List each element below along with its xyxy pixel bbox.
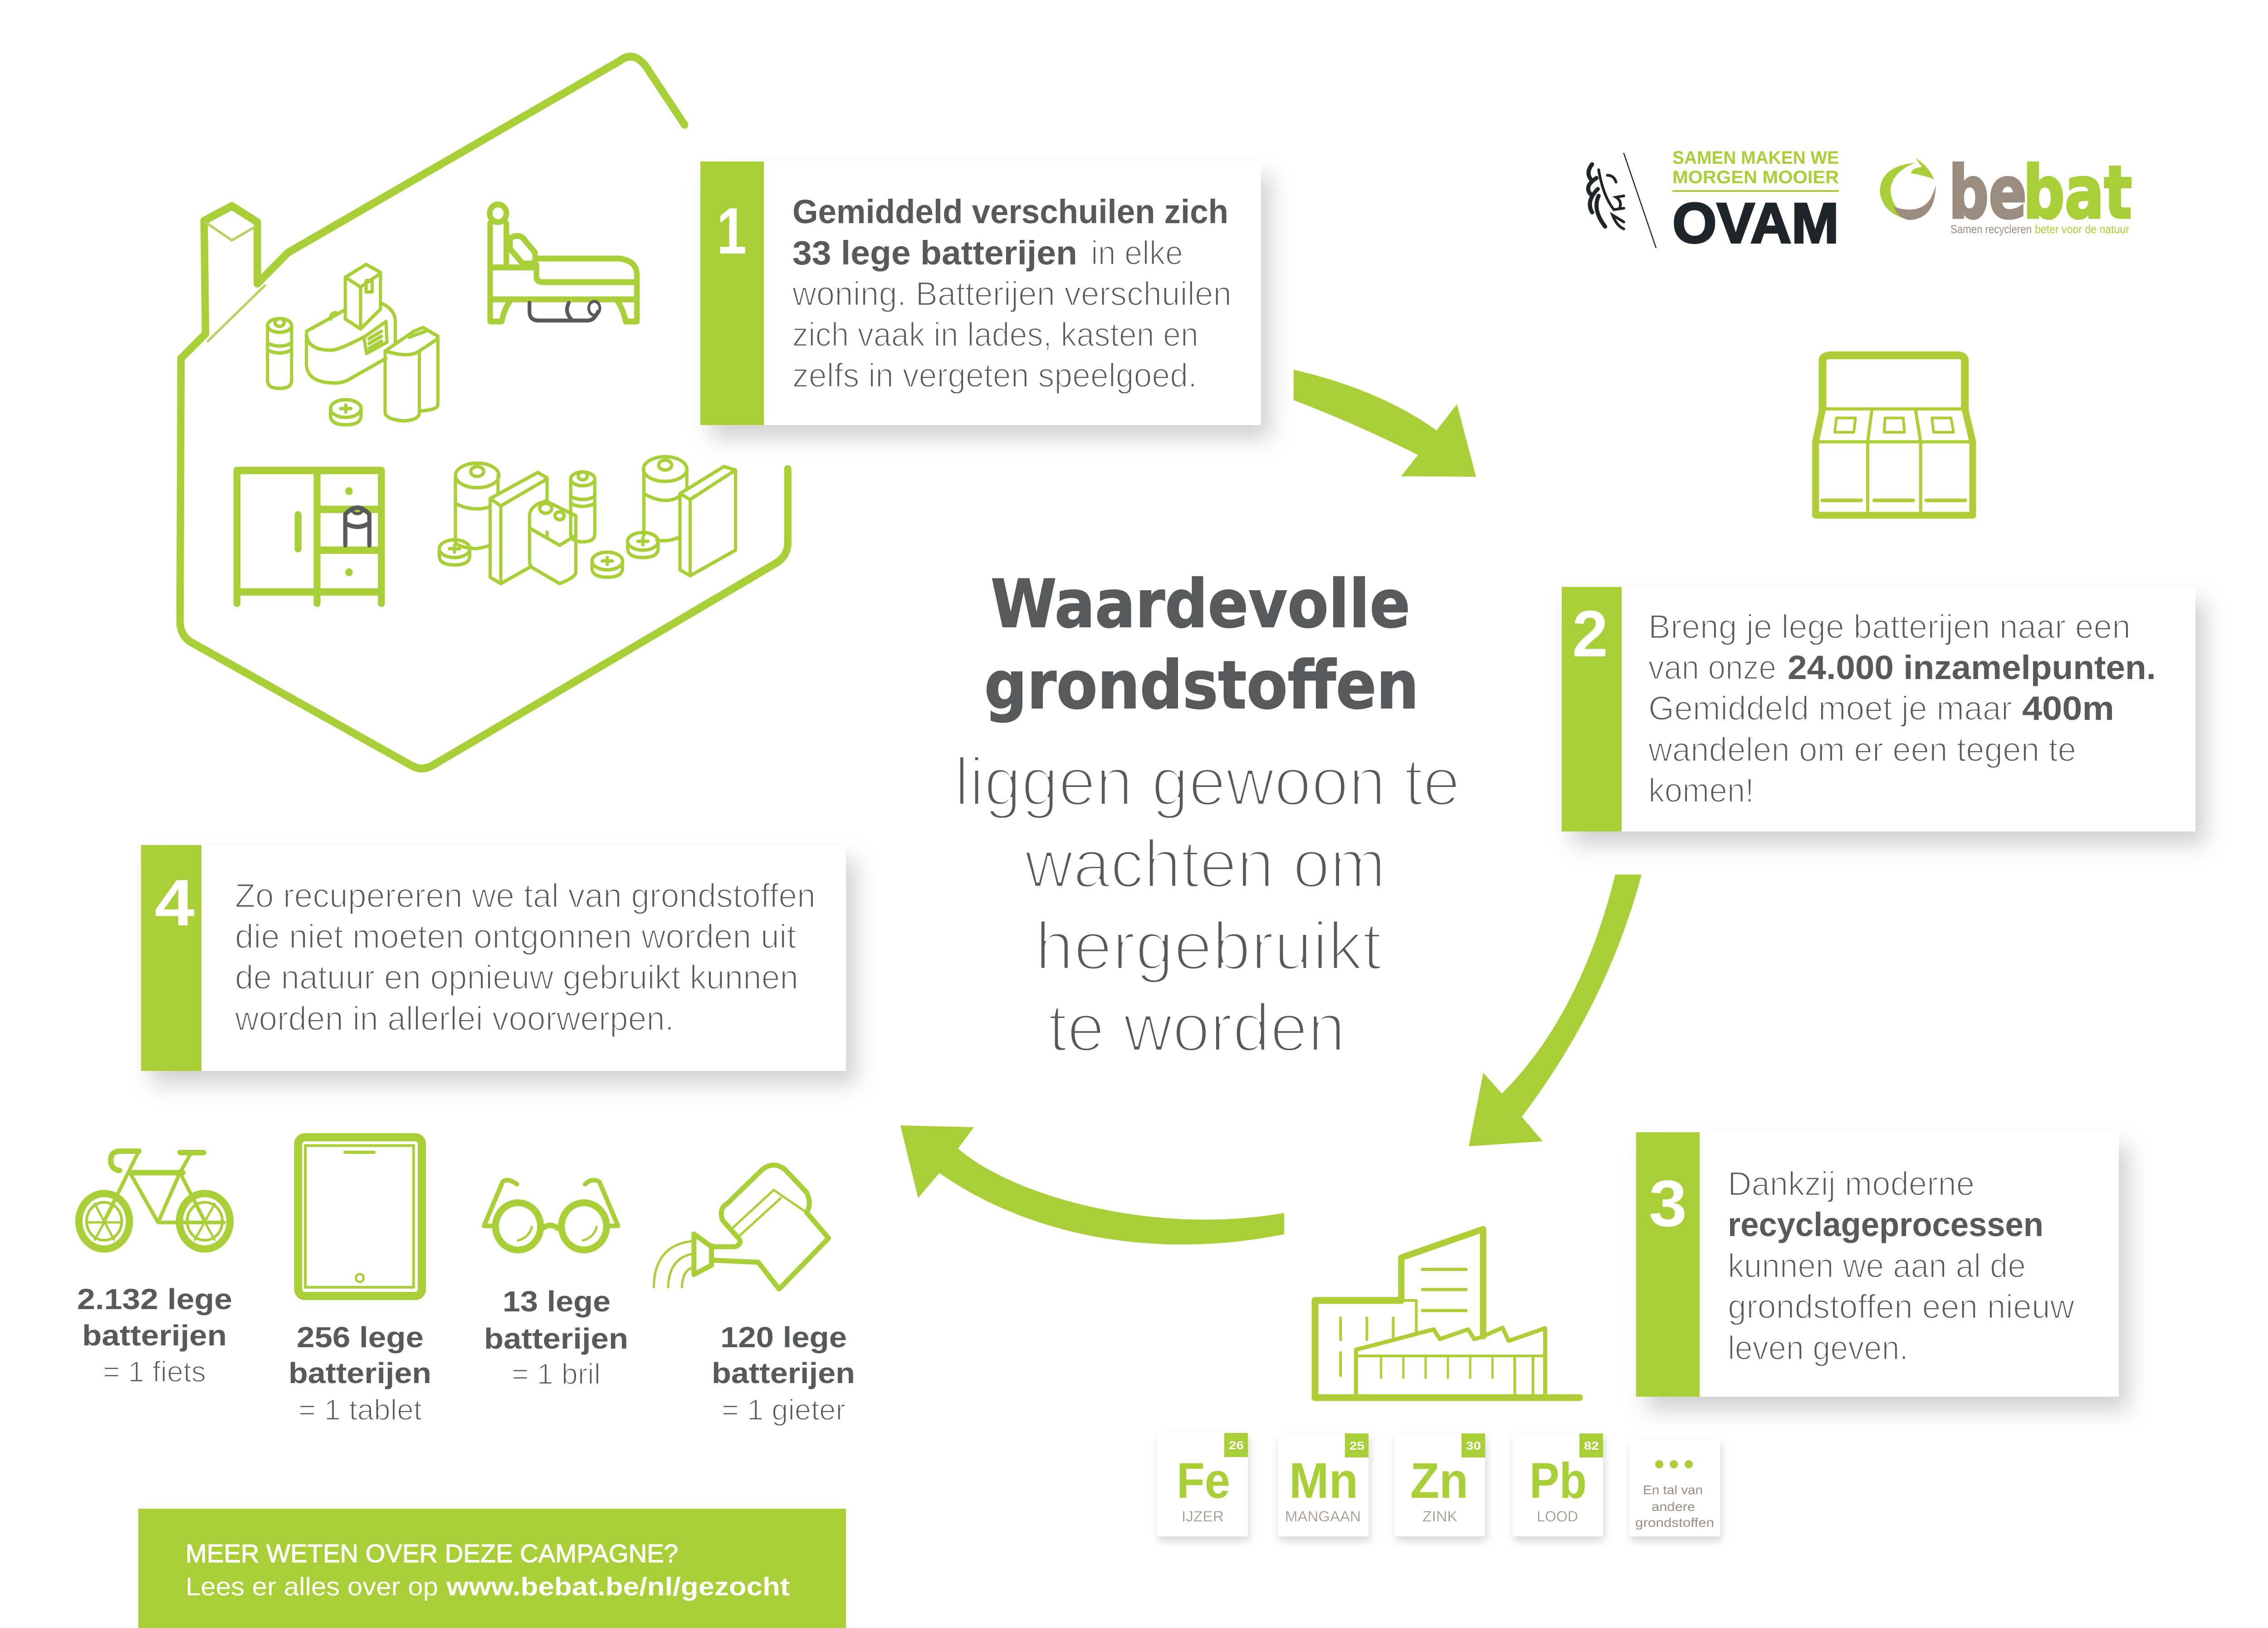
icon: pile of batteries xyxy=(439,457,735,584)
card: Fe xyxy=(1157,1433,1248,1536)
watering can label: 120 lege xyxy=(720,1321,847,1354)
stat: glasses xyxy=(484,1180,628,1390)
step number 1: 1 xyxy=(717,194,747,268)
step 1 text: in elke xyxy=(1091,234,1183,272)
step 4 text: worden in allerlei voorwerpen. xyxy=(235,1000,674,1037)
subheading: te worden xyxy=(1048,989,1345,1066)
banner text: www.bebat.be/nl/gezocht xyxy=(446,1572,790,1601)
card: Mn: Mn xyxy=(1289,1453,1358,1509)
card: Mn: 25 xyxy=(1349,1440,1364,1452)
step 4 text: Zo recupereren we tal van grondstoffen xyxy=(235,877,816,914)
step 1 text xyxy=(792,193,1232,394)
watering can label: = 1 gieter xyxy=(722,1393,846,1426)
bicycle label: = 1 fiets xyxy=(103,1355,206,1388)
arrow: step 2 to 3 xyxy=(1469,875,1642,1146)
subheading: liggen gewoon te xyxy=(954,743,1460,820)
card: Zn: ZINK xyxy=(1422,1508,1457,1525)
card: other raw materials: andere xyxy=(1652,1500,1695,1514)
card: Fe: 26 xyxy=(1229,1439,1244,1452)
step 2 text: van onze xyxy=(1648,649,1776,686)
card: other raw materials xyxy=(1629,1439,1720,1536)
step 1 text: 33 lege batterijen xyxy=(792,234,1077,272)
arrow: step 1 to 2 xyxy=(1294,370,1476,477)
heading xyxy=(984,566,1419,724)
banner text xyxy=(186,1539,790,1601)
panel: step 1 xyxy=(700,161,1261,425)
watering can label xyxy=(712,1321,855,1426)
OVAM slogan xyxy=(1672,148,1839,192)
card: Pb: Pb xyxy=(1530,1453,1587,1509)
icon: recycling factory xyxy=(1315,1229,1579,1398)
bebat wordmark: bat xyxy=(2023,150,2132,235)
card: Pb: LOOD xyxy=(1537,1508,1578,1525)
step 3 text: leven geven. xyxy=(1728,1329,1908,1367)
panel: step 4 xyxy=(141,845,846,1071)
tablet label: = 1 tablet xyxy=(298,1393,422,1426)
card: other raw materials: grondstoffen xyxy=(1635,1516,1714,1530)
arrow: step 3 to 4 xyxy=(900,1125,1284,1245)
step 4 text: de natuur en opnieuw gebruikt kunnen xyxy=(235,958,798,996)
icon: bicycle xyxy=(79,1151,230,1249)
OVAM wordmark: OVAM xyxy=(1672,192,1839,255)
chimney detail xyxy=(205,222,265,341)
step 2 text: Gemiddeld moet je maar xyxy=(1648,689,2012,727)
card: Pb xyxy=(1512,1433,1603,1536)
watering can label: batterijen xyxy=(712,1357,855,1389)
subheading: wachten om xyxy=(1024,826,1386,902)
step 3 text: kunnen we aan al de xyxy=(1728,1247,2026,1285)
heading: grondstoffen xyxy=(984,647,1419,724)
panel: step 3 xyxy=(1636,1132,2119,1397)
step 2 text: 24.000 inzamelpunten. xyxy=(1788,649,2156,686)
step 3 text: recyclageprocessen xyxy=(1728,1206,2043,1243)
bebat tagline xyxy=(1950,222,2129,236)
glasses label: batterijen xyxy=(484,1322,628,1355)
step 4 text: die niet moeten ontgonnen worden uit xyxy=(235,918,796,955)
bicycle label: 2.132 lege xyxy=(77,1283,232,1315)
element cards xyxy=(1157,1433,1720,1536)
logo: OVAM xyxy=(1588,148,1839,255)
card: Mn xyxy=(1278,1433,1369,1536)
call to action banner xyxy=(138,1509,846,1628)
banner text: Lees er alles over op xyxy=(186,1572,438,1601)
step 2 text: komen! xyxy=(1648,772,1754,809)
tablet label: batterijen xyxy=(288,1357,431,1389)
center title xyxy=(954,566,1460,1066)
bebat wordmark: be xyxy=(1949,150,2027,235)
step 3 text: Dankzij moderne xyxy=(1728,1165,1975,1203)
icon: watering can xyxy=(654,1165,829,1289)
subheading xyxy=(954,743,1460,1066)
icon: cabinet xyxy=(237,470,381,603)
glasses label: 13 lege xyxy=(503,1285,611,1318)
step 2 text: Breng je lege batterijen naar een xyxy=(1648,608,2131,645)
card: Fe: IJZER xyxy=(1182,1508,1224,1525)
card: other raw materials: En tal van xyxy=(1643,1483,1703,1497)
logo: bebat xyxy=(1880,150,2132,236)
card: Zn xyxy=(1394,1433,1485,1536)
glasses label xyxy=(484,1285,628,1390)
icon: tablet xyxy=(298,1137,422,1296)
house outline xyxy=(180,57,788,768)
OVAM slogan: MORGEN MOOIER xyxy=(1672,167,1839,187)
step number 3: 3 xyxy=(1649,1167,1687,1240)
step 3 text xyxy=(1728,1165,2075,1367)
step 2 text xyxy=(1648,608,2156,809)
bebat tagline: beter voor de natuur xyxy=(2035,222,2129,236)
OVAM slogan: SAMEN MAKEN WE xyxy=(1672,148,1839,168)
step number 2: 2 xyxy=(1572,597,1608,670)
step 1 text: zelfs in vergeten speelgoed. xyxy=(792,357,1197,394)
bebat wordmark xyxy=(1949,150,2132,235)
bicycle label: batterijen xyxy=(82,1319,227,1352)
card: Zn: 30 xyxy=(1466,1440,1481,1452)
step number 4: 4 xyxy=(155,866,195,939)
stat: tablet xyxy=(288,1137,431,1426)
bicycle label xyxy=(77,1283,232,1388)
stat: watering can xyxy=(654,1165,855,1426)
illustration: house with hidden batteries xyxy=(180,57,788,768)
step 2 text: 400m xyxy=(2022,689,2114,727)
step 4 text xyxy=(235,877,816,1037)
step 1 text: woning. Batterijen verschuilen xyxy=(792,275,1232,313)
tablet label: 256 lege xyxy=(297,1321,424,1354)
bebat circular mark xyxy=(1880,158,1936,220)
tablet label xyxy=(288,1321,431,1426)
icon: tool battery group xyxy=(268,264,438,425)
icon: glasses xyxy=(484,1180,618,1250)
step 1 text: Gemiddeld verschuilen zich xyxy=(792,193,1228,230)
banner text: MEER WETEN OVER DEZE CAMPAGNE? xyxy=(186,1539,678,1568)
card: Pb: 82 xyxy=(1584,1440,1599,1452)
step 3 text: grondstoffen een nieuw xyxy=(1728,1288,2075,1325)
bebat tagline: Samen recycleren xyxy=(1950,222,2032,236)
heading: Waardevolle xyxy=(991,566,1410,643)
panel: step 2 xyxy=(1562,587,2195,831)
subheading: hergebruikt xyxy=(1035,908,1382,984)
card: Zn: Zn xyxy=(1410,1453,1468,1509)
stat: bicycle xyxy=(77,1151,232,1388)
lion emblem xyxy=(1588,153,1656,248)
step 2 text: wandelen om er een tegen te xyxy=(1648,731,2076,768)
step 1 text: zich vaak in lades, kasten en xyxy=(792,316,1198,353)
glasses label: = 1 bril xyxy=(512,1358,601,1390)
icon: bed with hidden batteries xyxy=(490,205,637,322)
card: Fe: Fe xyxy=(1177,1453,1230,1509)
icon: collection bin xyxy=(1816,355,1973,515)
card: Mn: MANGAAN xyxy=(1285,1508,1361,1525)
